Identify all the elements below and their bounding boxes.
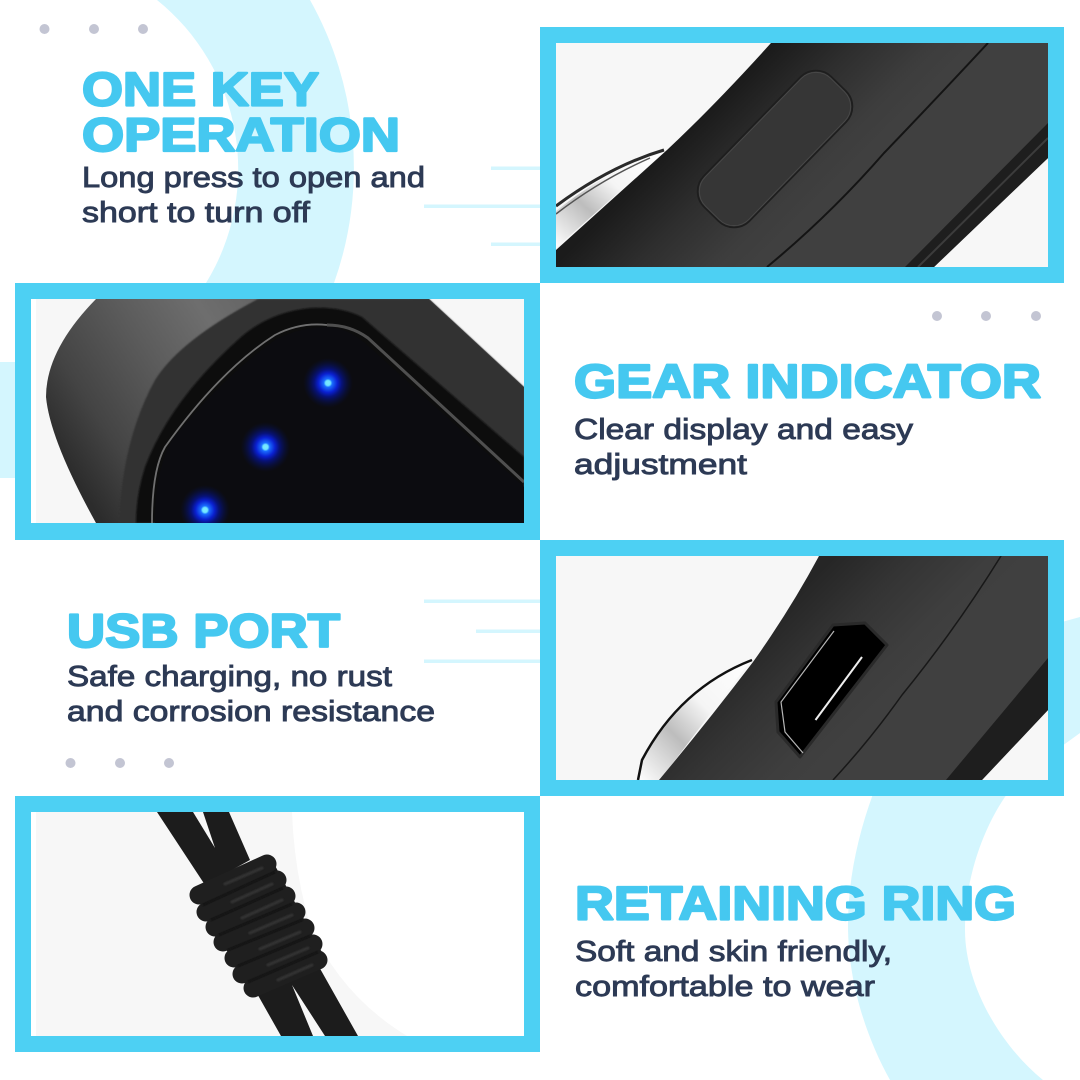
usb socket <box>776 623 887 757</box>
description: usb port <box>67 661 435 728</box>
text block: retaining ring <box>575 876 1016 1003</box>
heading: one key operation <box>82 62 400 161</box>
background crescent: right edge <box>1062 617 1080 746</box>
cord strands <box>157 812 358 1036</box>
description: gear indicator: Clear display and easy <box>574 414 914 446</box>
background crescent: left edge <box>0 362 18 478</box>
dots: top left <box>40 24 148 34</box>
speed lines: usb port <box>424 600 540 663</box>
heading: one key operation: OPERATION <box>82 108 400 161</box>
bezel <box>119 299 524 523</box>
body <box>659 556 1048 780</box>
text block: usb port <box>67 604 435 728</box>
speed lines: top <box>424 166 540 246</box>
heading: gear indicator: GEAR INDICATOR <box>574 354 1041 408</box>
panel: retaining ring photo <box>15 796 540 1052</box>
background crescent: bottom right <box>848 794 1043 1080</box>
groove <box>767 43 988 267</box>
description: retaining ring: comfortable to wear <box>575 971 875 1003</box>
description: gear indicator: adjustment <box>574 449 747 481</box>
body <box>556 43 1048 267</box>
LEDs <box>182 360 351 523</box>
text block: one key operation <box>82 62 425 229</box>
dots: gear indicator <box>932 311 1041 321</box>
panel: usb port photo <box>540 540 1064 796</box>
description: retaining ring: Soft and skin friendly, <box>575 936 892 968</box>
panel: gear indicator photo <box>15 283 540 540</box>
description: one key operation: Long press to open and <box>82 162 425 194</box>
power button <box>697 70 854 228</box>
description: one key operation: short to turn off <box>82 197 311 229</box>
description: one key operation <box>82 162 425 229</box>
background crescent: top left <box>157 0 354 283</box>
black face <box>155 486 524 523</box>
edge band <box>905 123 1048 267</box>
chrome ring <box>556 150 664 248</box>
heading: one key operation: ONE KEY <box>82 62 319 116</box>
rubber ring coils <box>197 860 325 992</box>
dots: usb port <box>66 758 174 768</box>
description: usb port: Safe charging, no rust <box>67 661 392 693</box>
description: usb port: and corrosion resistance <box>67 696 435 728</box>
description: gear indicator <box>574 414 914 481</box>
text block: gear indicator <box>574 354 1041 481</box>
groove <box>833 556 1001 780</box>
photo backdrop <box>36 812 407 1036</box>
description: retaining ring <box>575 936 892 1003</box>
chrome ring <box>638 660 752 780</box>
edge band <box>946 658 1048 780</box>
panel: button photo <box>540 27 1064 283</box>
heading: retaining ring: RETAINING RING <box>575 876 1016 930</box>
heading: usb port: USB PORT <box>67 604 340 657</box>
device housing <box>46 299 524 523</box>
